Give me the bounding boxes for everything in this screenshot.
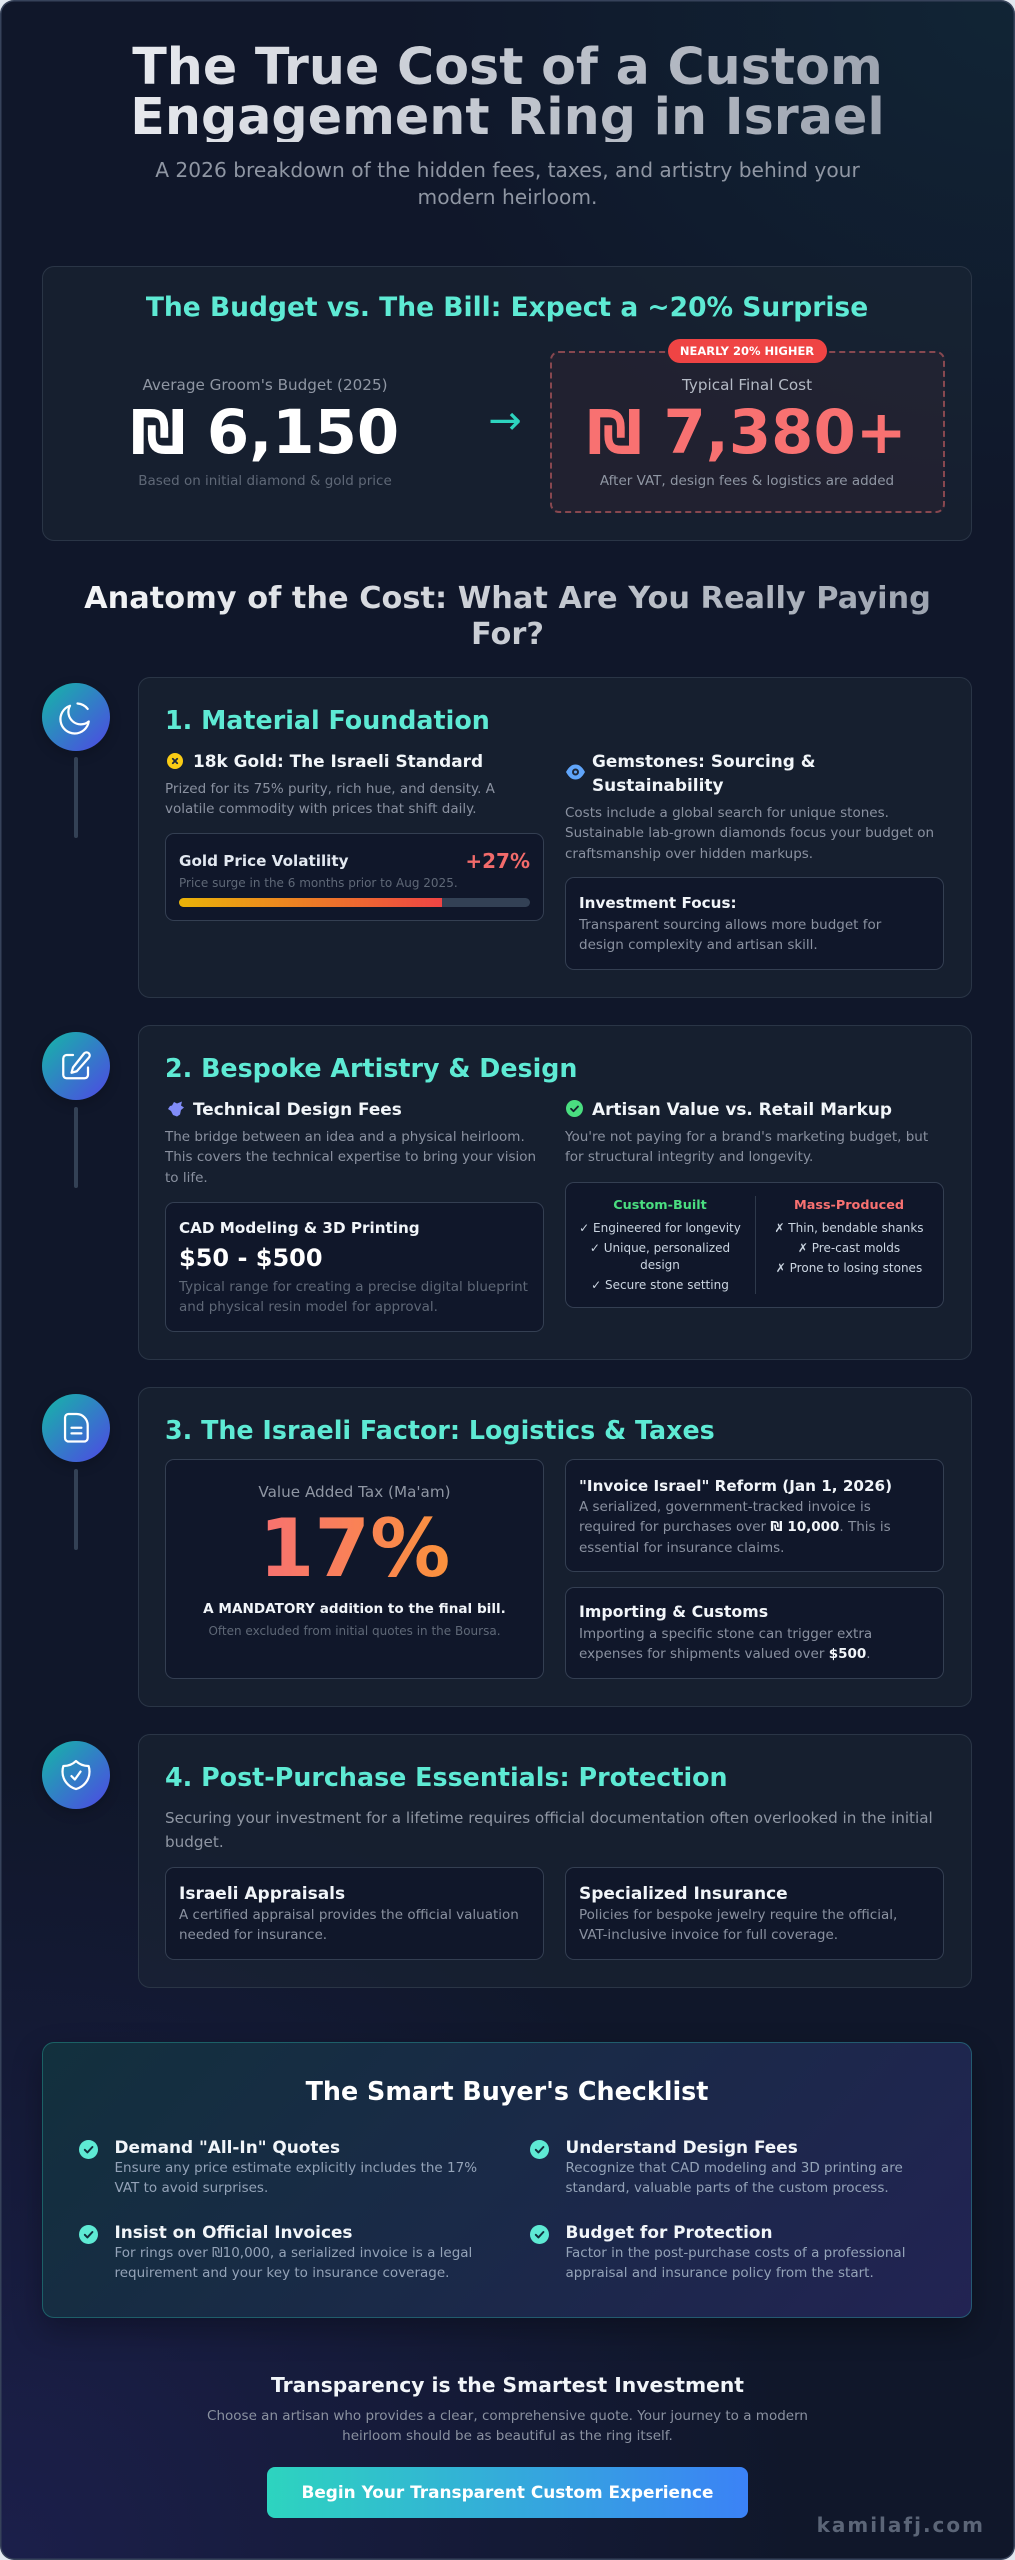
box title: CAD Modeling & 3D Printing — [179, 1219, 420, 1237]
mass produced column — [774, 1198, 924, 1275]
panel: israeli factor — [138, 1387, 972, 1707]
custom built column: ✓ Engineered for longevity — [579, 1220, 741, 1234]
excluded note: Often excluded from initial quotes in the Boursa. — [208, 1624, 501, 1638]
subtitle: modern heirloom. — [418, 185, 597, 209]
checklist item 3 — [79, 2222, 472, 2281]
VAT number: 17% — [259, 1502, 450, 1595]
note: Price surge in the 6 months prior to Aug 2025. — [179, 876, 458, 890]
box title: "Invoice Israel" Reform (Jan 1, 2026) — [579, 1477, 892, 1495]
technical heading: Technical Design Fees — [193, 1099, 402, 1119]
custom built column: ✓ Secure stone setting — [591, 1278, 729, 1292]
panel: protection — [138, 1734, 972, 1988]
label: Gold Price Volatility — [179, 852, 349, 870]
checklist item 4 — [530, 2222, 905, 2281]
icon: cube — [168, 1102, 184, 1116]
section heading — [84, 581, 931, 652]
insurance box — [565, 1867, 944, 1960]
artisan heading: Artisan Value vs. Retail Markup — [592, 1099, 892, 1119]
box text: VAT-inclusive invoice for full coverage. — [579, 1927, 838, 1943]
call to action button: Begin Your Transparent Custom Experience — [301, 2482, 714, 2502]
section text: Securing your investment for a lifetime requires official documentation often overlooked in the initial — [165, 1809, 933, 1827]
final cost stat: Typical Final Cost — [682, 376, 812, 394]
section title: 2. Bespoke Artistry & Design — [165, 1053, 577, 1083]
checklist title: The Smart Buyer's Checklist — [306, 2076, 708, 2106]
price range: $50 - $500 — [179, 1244, 323, 1272]
mass produced column: ✗ Pre-cast molds — [798, 1241, 900, 1255]
checklist item 2: Recognize that CAD modeling and 3D printing are — [566, 2160, 903, 2176]
icon: shield — [42, 1741, 110, 1809]
box text — [579, 1626, 872, 1662]
artisan text — [565, 1129, 928, 1165]
checklist item 1: VAT to avoid surprises. — [114, 2180, 268, 2196]
mass produced column: Mass-Produced — [794, 1198, 904, 1213]
box title: Specialized Insurance — [579, 1884, 788, 1904]
box text — [579, 1499, 891, 1556]
box text: essential for insurance claims. — [579, 1540, 784, 1556]
checklist item 2: Understand Design Fees — [566, 2137, 798, 2157]
panel: budget vs bill — [42, 266, 972, 541]
icon: document — [42, 1394, 110, 1462]
call to action button — [267, 2467, 748, 2518]
custom built column: ✓ Unique, personalized — [590, 1241, 730, 1255]
section text: budget. — [165, 1833, 224, 1851]
percent: +27% — [465, 849, 530, 873]
checklist item 2: standard, valuable parts of the custom process. — [566, 2180, 889, 2196]
box text: A serialized, government-tracked invoice is — [579, 1499, 871, 1515]
box text: Typical range for creating a precise digital blueprint — [179, 1279, 528, 1295]
section title: 4. Post-Purchase Essentials: Protection — [165, 1762, 728, 1792]
checklist item 4: appraisal and insurance policy from the start. — [566, 2265, 874, 2281]
VAT box — [165, 1459, 544, 1679]
custom built column: design — [640, 1258, 680, 1272]
connector line — [74, 1107, 78, 1188]
box text — [579, 1907, 897, 1943]
gold text: Prized for its 75% purity, rich hue, and density. A — [165, 781, 495, 797]
icon: check — [566, 1100, 583, 1117]
badge — [668, 339, 826, 363]
box text: A certified appraisal provides the official valuation — [179, 1907, 519, 1923]
average budget stat: Based on initial diamond & gold price — [138, 473, 392, 489]
budget heading: The Budget vs. The Bill: Expect a ~20% Surprise — [146, 292, 868, 323]
final cost stat — [550, 351, 944, 513]
subtitle — [155, 158, 860, 209]
investment focus box — [565, 877, 944, 970]
checklist item 4: Budget for Protection — [566, 2222, 773, 2242]
section heading: For? — [471, 617, 544, 652]
box text: needed for insurance. — [179, 1927, 327, 1943]
gemstones heading: Gemstones: Sourcing & — [592, 751, 815, 771]
checklist item 1: Demand "All-In" Quotes — [114, 2137, 340, 2157]
gemstones heading: Sustainability — [592, 775, 723, 795]
technical text: to life. — [165, 1170, 208, 1186]
final cost stat: ₪ 7,380+ — [587, 398, 907, 468]
gemstones text: Costs include a global search for unique stones. — [565, 805, 889, 821]
mandatory note: A MANDATORY addition to the final bill. — [203, 1601, 506, 1617]
gold text — [165, 781, 495, 817]
closing text: heirloom should be as beautiful as the ring itself. — [342, 2428, 673, 2444]
title: The True Cost of a Custom — [132, 37, 883, 96]
box text — [179, 1907, 519, 1943]
closing text — [207, 2408, 808, 2444]
box title: Israeli Appraisals — [179, 1884, 345, 1904]
connector line — [74, 757, 78, 838]
VAT label: Value Added Tax (Ma'am) — [258, 1483, 451, 1501]
section heading: Anatomy of the Cost: What Are You Really Paying — [84, 581, 931, 616]
invoice box — [565, 1459, 944, 1572]
section title: 1. Material Foundation — [165, 705, 490, 735]
box text: expenses for shipments valued over $500. — [579, 1646, 871, 1662]
closing heading: Transparency is the Smartest Investment — [271, 2373, 744, 2397]
gemstones text: Sustainable lab-grown diamonds focus your budget on — [565, 825, 934, 841]
mass produced column: ✗ Prone to losing stones — [776, 1261, 922, 1275]
icon: edit — [42, 1032, 110, 1100]
gold price volatility box — [165, 833, 544, 921]
connector line — [74, 1469, 78, 1550]
artisan text: You're not paying for a brand's marketing budget, but — [565, 1129, 928, 1145]
closing text: Choose an artisan who provides a clear, comprehensive quote. Your journey to a modern — [207, 2408, 808, 2424]
custom built column: Custom-Built — [613, 1198, 707, 1213]
checklist item 3: requirement and your key to insurance coverage. — [114, 2265, 449, 2281]
checklist item 2 — [530, 2137, 903, 2196]
box text: and physical resin model for approval. — [179, 1299, 438, 1315]
box text: design complexity and artisan skill. — [579, 937, 818, 953]
custom built column — [579, 1198, 741, 1292]
panel: material foundation — [138, 677, 972, 998]
gemstones text — [565, 805, 934, 862]
subtitle: A 2026 breakdown of the hidden fees, taxes, and artistry behind your — [155, 158, 860, 182]
gemstones heading — [592, 751, 815, 795]
box title: Importing & Customs — [579, 1602, 768, 1621]
box text: Transparent sourcing allows more budget for — [579, 917, 881, 933]
gold heading: 18k Gold: The Israeli Standard — [193, 751, 483, 771]
mass produced column: ✗ Thin, bendable shanks — [774, 1220, 924, 1234]
section text — [165, 1809, 933, 1851]
customs box — [565, 1587, 944, 1679]
gemstones text: craftsmanship over hidden markups. — [565, 846, 813, 862]
box text: required for purchases over ₪ 10,000. This is — [579, 1519, 891, 1535]
panel: bespoke artistry — [138, 1025, 972, 1360]
technical text: This covers the technical expertise to bring your vision — [165, 1149, 536, 1165]
checklist item 1: Ensure any price estimate explicitly includes the 17% — [114, 2160, 477, 2176]
panel: checklist — [42, 2042, 972, 2318]
arrow: → — [488, 398, 522, 444]
average budget stat: ₪ 6,150 — [131, 398, 399, 468]
comparison box — [565, 1182, 944, 1308]
checklist item 3: Insist on Official Invoices — [114, 2222, 352, 2242]
section title: 3. The Israeli Factor: Logistics & Taxes — [165, 1415, 715, 1445]
box text: Importing a specific stone can trigger extra — [579, 1626, 872, 1642]
checklist item 4: Factor in the post-purchase costs of a professional — [566, 2245, 905, 2261]
technical text — [164, 1129, 536, 1186]
icon: eye — [566, 764, 585, 780]
final cost stat: After VAT, design fees & logistics are added — [600, 473, 894, 489]
box text: Policies for bespoke jewelry require the official, — [579, 1907, 897, 1923]
icon: gold coin — [167, 753, 183, 769]
CAD box — [165, 1202, 544, 1332]
box title: Investment Focus: — [579, 894, 737, 912]
average budget stat — [131, 376, 399, 489]
checklist item 3: For rings over ₪10,000, a serialized invoice is a legal — [114, 2245, 472, 2261]
checklist item 1 — [79, 2137, 477, 2196]
title: Engagement Ring in Israel — [130, 87, 885, 146]
icon: moon — [42, 683, 110, 751]
technical text: The bridge between an idea and a physical heirloom. — [165, 1129, 525, 1145]
gold text: volatile commodity with prices that shift daily. — [165, 801, 477, 817]
title — [130, 37, 885, 146]
badge: NEARLY 20% HIGHER — [680, 344, 814, 358]
box text — [578, 917, 882, 953]
artisan text: for structural integrity and longevity. — [565, 1149, 813, 1165]
watermark: kamilafj.com — [817, 2513, 985, 2537]
appraisals box — [165, 1867, 544, 1960]
box text — [179, 1279, 528, 1315]
progress bar — [179, 898, 530, 907]
average budget stat: Average Groom's Budget (2025) — [142, 376, 388, 394]
